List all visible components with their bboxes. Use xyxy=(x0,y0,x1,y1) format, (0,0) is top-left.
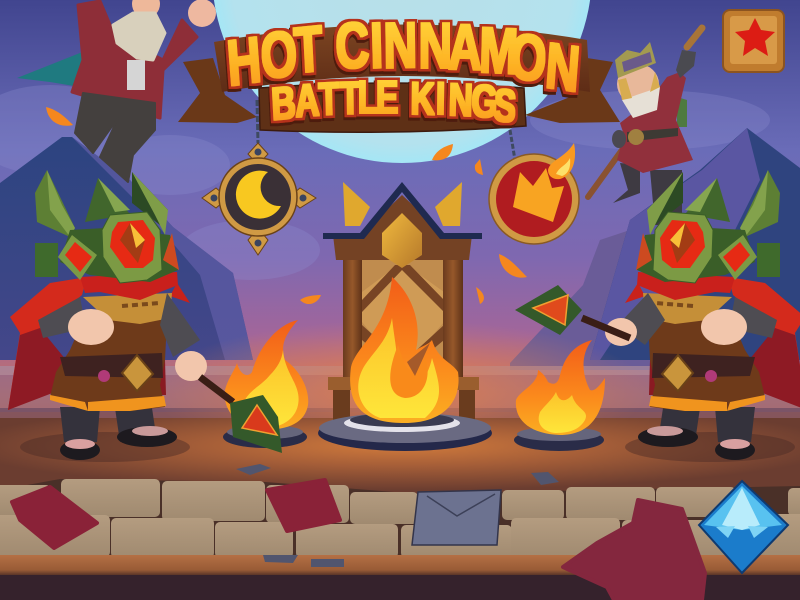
mountains left xyxy=(0,137,253,360)
right goblin xyxy=(625,170,800,462)
stone wall xyxy=(0,479,800,560)
star button xyxy=(723,10,784,72)
right flame base xyxy=(514,427,604,451)
left goblin weapon xyxy=(200,377,282,453)
cushion left xyxy=(12,487,97,548)
title text: BATTLE KINGS xyxy=(270,72,518,133)
balcony railing xyxy=(0,366,800,420)
right goblin hand xyxy=(605,318,637,346)
cushion centre xyxy=(267,480,340,531)
left goblin arm xyxy=(160,293,200,357)
king right xyxy=(588,28,702,225)
wooden ledge xyxy=(0,555,800,575)
crown medallion xyxy=(489,130,579,244)
right goblin weapon xyxy=(515,285,630,338)
moon xyxy=(212,0,592,163)
title text: HOT CINNAMON xyxy=(225,9,582,107)
king left xyxy=(17,0,216,182)
left goblin hand xyxy=(175,351,207,381)
stone chips xyxy=(236,464,559,567)
centre flame xyxy=(350,277,459,423)
centre brazier base xyxy=(318,413,492,451)
right flame xyxy=(516,340,605,435)
mountains right xyxy=(590,128,800,360)
cushion right xyxy=(563,500,705,600)
sky background xyxy=(0,0,800,430)
distant mountain right xyxy=(510,220,800,370)
left goblin xyxy=(8,170,200,462)
embers xyxy=(46,107,527,304)
title banner xyxy=(178,9,620,133)
left flame xyxy=(225,320,308,430)
moon medallion xyxy=(202,100,316,255)
horizon glow xyxy=(150,320,650,460)
dark base xyxy=(0,575,800,600)
diamond gem xyxy=(699,481,788,573)
left flame base xyxy=(223,425,307,448)
clouds xyxy=(0,85,770,280)
envelope xyxy=(412,490,501,545)
right goblin arm xyxy=(618,293,665,345)
stage floor xyxy=(0,418,800,498)
throne xyxy=(323,182,482,424)
